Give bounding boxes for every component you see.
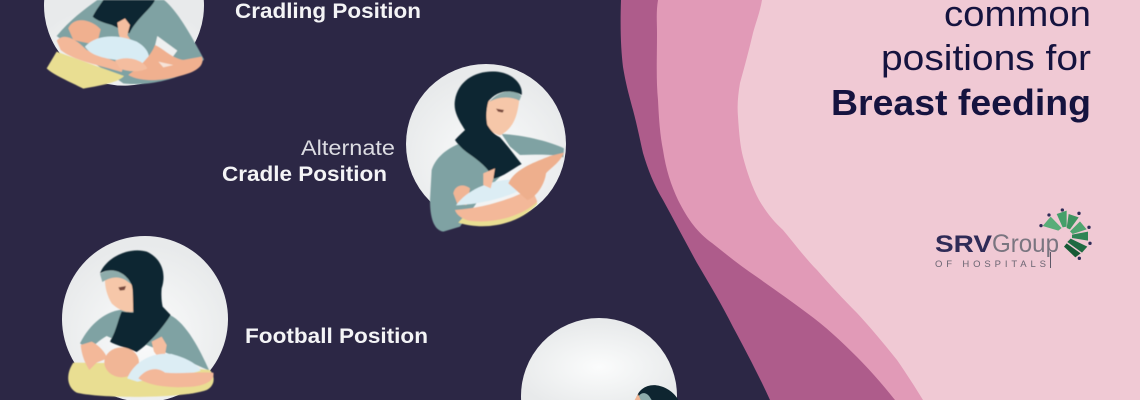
pillow xyxy=(68,363,214,397)
hijab xyxy=(100,250,171,352)
hand and forearm xyxy=(508,153,564,200)
backdrop disc xyxy=(406,64,566,224)
hand xyxy=(115,58,147,71)
blanket xyxy=(85,36,149,70)
pale wrist gap xyxy=(158,62,173,67)
face xyxy=(486,96,519,135)
mother lower arm xyxy=(138,369,214,387)
sweater body xyxy=(430,143,503,232)
forearm xyxy=(57,37,124,72)
backdrop disc xyxy=(44,0,204,86)
lower arm xyxy=(455,188,537,221)
wave: light pink layer xyxy=(738,0,1140,400)
sweater xyxy=(80,309,209,371)
face xyxy=(105,275,134,312)
blanket xyxy=(456,179,523,205)
right arm xyxy=(128,45,202,80)
label: Cradling Position: Cradling Position xyxy=(235,0,421,23)
heading line: Breast feeding: Breast feeding xyxy=(831,82,1091,123)
baby head xyxy=(104,347,139,377)
baby foot xyxy=(152,337,173,362)
label: Cradle Position: Cradle Position xyxy=(222,163,387,186)
pillow xyxy=(47,52,124,89)
wave: dark magenta layer xyxy=(621,0,1140,400)
backdrop disc xyxy=(62,236,228,400)
label: Alternate: Alternate xyxy=(301,137,395,160)
logo subtitle: OF HOSPITALS xyxy=(935,259,1046,270)
backdrop disc xyxy=(521,318,677,400)
mother left hand xyxy=(81,342,107,370)
heading line: positions for: positions for xyxy=(881,37,1091,78)
logo fan icon xyxy=(1039,208,1092,260)
raised arm xyxy=(502,134,564,157)
pillow xyxy=(458,197,537,226)
eye xyxy=(496,109,504,113)
mother figure xyxy=(47,0,204,89)
heading xyxy=(831,0,1091,123)
baby foot xyxy=(483,168,495,188)
hijab xyxy=(455,71,522,179)
mother figure xyxy=(430,71,564,232)
blanket xyxy=(127,354,201,382)
headband xyxy=(489,91,521,102)
mother head, cropped xyxy=(635,385,678,400)
logo wordmark Group: Group xyxy=(992,230,1059,258)
illustration: fourth position, cropped at bottom xyxy=(521,318,678,400)
forehead xyxy=(635,394,641,400)
logo: SRV Group of Hospitals xyxy=(935,208,1092,270)
sweater xyxy=(57,0,204,84)
pale gap xyxy=(155,36,177,58)
headband xyxy=(637,393,652,400)
logo divider xyxy=(1050,252,1051,268)
hijab xyxy=(93,0,155,33)
logo wordmark SRV: SRV xyxy=(935,231,992,258)
hijab xyxy=(636,385,678,400)
illustration: football position xyxy=(62,236,228,400)
mother figure xyxy=(68,250,214,397)
label: Football Position: Football Position xyxy=(245,325,428,348)
eye xyxy=(118,286,126,291)
illustration: alternate cradle position xyxy=(406,64,566,232)
wave: medium pink layer xyxy=(657,0,1140,400)
headband xyxy=(100,270,132,285)
illustration: cradling position xyxy=(44,0,204,89)
baby head xyxy=(453,186,470,205)
baby foot xyxy=(117,18,132,44)
upper arm xyxy=(68,20,101,45)
